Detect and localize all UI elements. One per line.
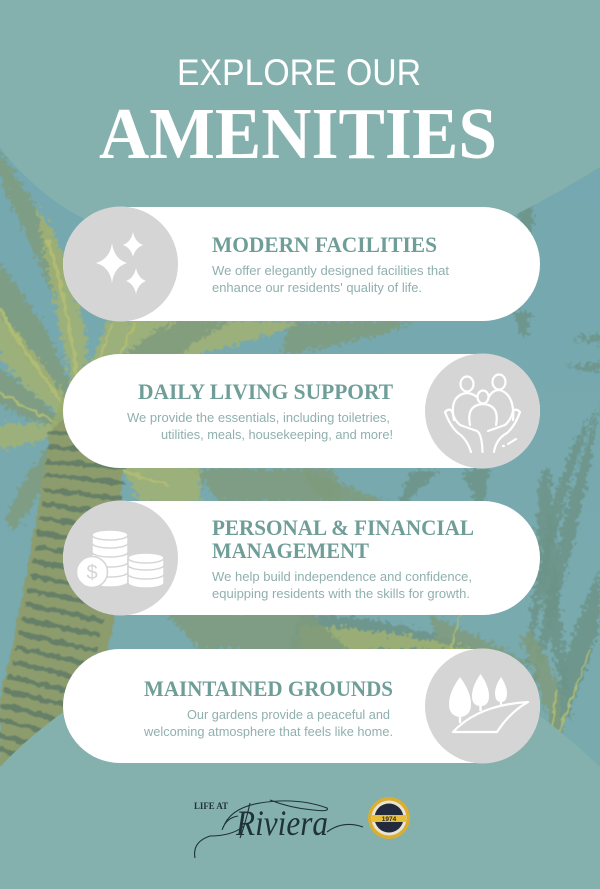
- text: personal and financial management: equipping residents with the skills for growth.: [212, 586, 470, 601]
- title: [99, 52, 497, 174]
- badge: since 1974: [368, 797, 410, 839]
- text: daily living support: We provide the essentials, including toiletries,: [127, 410, 390, 425]
- logo: life at riviera: [194, 800, 363, 858]
- panel: maintained grounds: [63, 648, 540, 764]
- text: modern facilities: MODERN FACILITIES: [212, 232, 437, 257]
- logo: life at riviera: LIFE AT: [194, 801, 228, 811]
- text: daily living support: DAILY LIVING SUPPORT: [138, 379, 393, 404]
- bottom teal arc: [0, 690, 600, 889]
- text: daily living support: [127, 379, 393, 442]
- badge: since 1974: 1974: [382, 816, 397, 823]
- text: maintained grounds: Our gardens provide a peaceful and: [187, 707, 390, 722]
- palm trunk: [0, 412, 123, 770]
- heading: amenities: AMENITIES: [99, 93, 497, 174]
- icon: hands holding family: [445, 374, 520, 452]
- icon: coin stacks: [76, 530, 164, 588]
- text: maintained grounds: welcoming atmosphere that feels like home.: [143, 724, 393, 739]
- text: personal and financial management: PERSONAL & FINANCIAL: [212, 515, 474, 540]
- panel: modern facilities: [63, 206, 540, 322]
- icon: sparkles: [96, 232, 146, 294]
- panel: daily living support: [63, 354, 540, 468]
- top teal arc: [0, 0, 600, 262]
- text: personal and financial management: We help build independence and confidence,: [212, 569, 472, 584]
- text: maintained grounds: MAINTAINED GROUNDS: [144, 676, 393, 701]
- icon: coin stacks: $: [86, 562, 98, 584]
- text: modern facilities: We offer elegantly designed facilities that: [212, 263, 449, 278]
- text: modern facilities: enhance our residents' quality of life.: [212, 280, 422, 295]
- text: personal and financial management: MANAGEMENT: [212, 538, 369, 563]
- text: daily living support: utilities, meals, housekeeping, and more!: [161, 427, 393, 442]
- logo: life at riviera: Riviera: [235, 803, 328, 843]
- icon: trees and lawn: [449, 674, 528, 732]
- text: modern facilities: [212, 232, 449, 295]
- text: maintained grounds: [143, 676, 393, 739]
- text: personal and financial management: [212, 515, 474, 601]
- heading: explore our: EXPLORE OUR: [177, 52, 421, 93]
- panel: personal and financial management: [63, 500, 540, 616]
